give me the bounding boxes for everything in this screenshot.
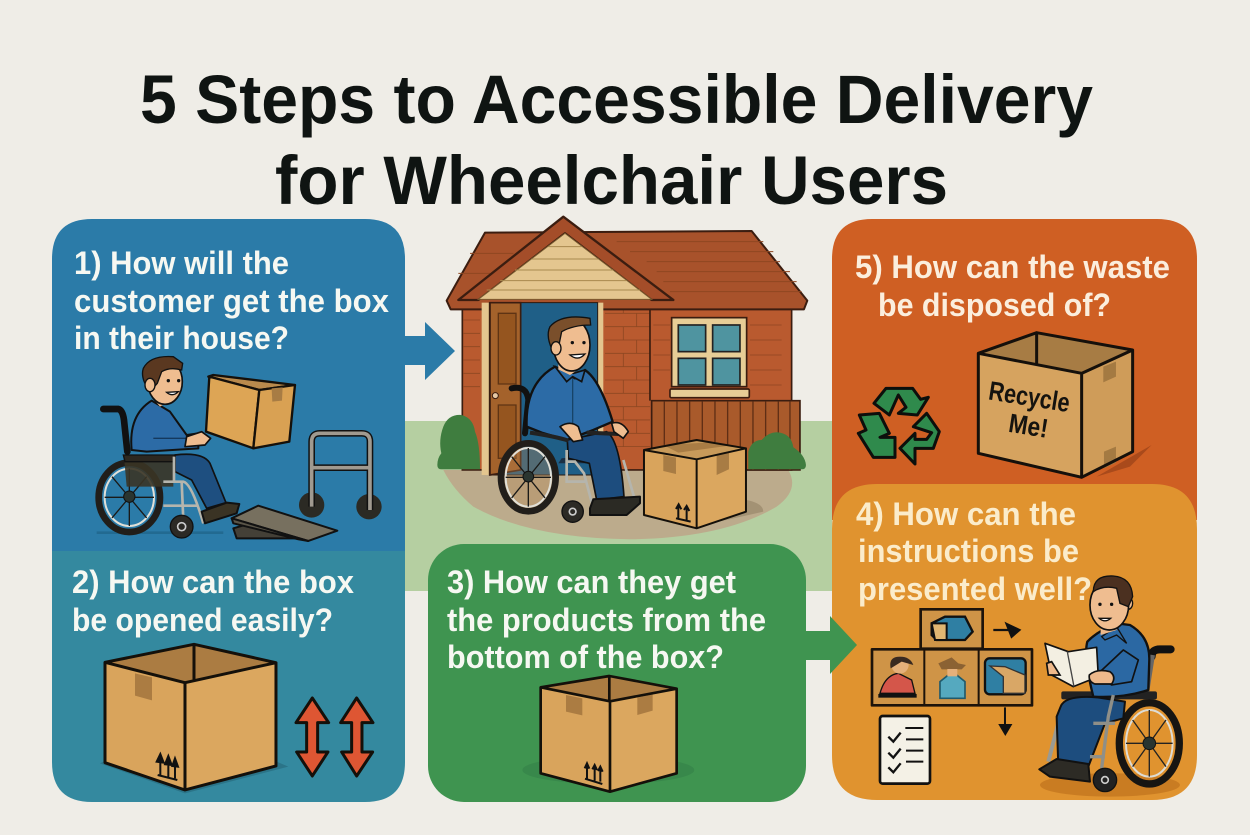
person reading in wheelchair xyxy=(1039,576,1180,797)
step 3 text: bottom of the box? xyxy=(447,639,724,675)
step 2 text: 2) How can the box xyxy=(72,564,354,600)
panel: step 2 opening box xyxy=(52,551,405,802)
panel: step 4 instructions xyxy=(832,484,1197,800)
step 3 text: 3) How can they get xyxy=(447,564,736,600)
step 1 text: 1) How will the xyxy=(74,245,289,281)
person in wheelchair with box, ramp and frame xyxy=(97,356,382,541)
arrow: step 1 to house xyxy=(405,322,455,380)
title: 5 Steps to Accessible Delivery xyxy=(140,61,1093,138)
panel: step 5 waste xyxy=(832,219,1197,520)
roof xyxy=(447,231,807,309)
doorway xyxy=(482,303,603,475)
step 4 text: 4) How can the xyxy=(856,496,1076,532)
icon: box held xyxy=(206,375,295,448)
step 1 text xyxy=(74,245,389,356)
step 5 text xyxy=(855,249,1170,323)
path xyxy=(443,470,792,539)
icon: ramp xyxy=(232,506,337,541)
step 4 text xyxy=(856,496,1092,607)
icon: up and down arrows xyxy=(296,698,373,776)
bushes xyxy=(437,415,806,469)
instruction pictograms xyxy=(872,609,1032,784)
window xyxy=(670,318,749,398)
panel: step 3 reaching products xyxy=(428,544,806,802)
gable xyxy=(458,217,673,300)
step 2 text xyxy=(72,564,354,638)
illustration: house with customer xyxy=(437,217,807,539)
step 5 text: be disposed of? xyxy=(878,287,1111,323)
step 1 text: customer get the box xyxy=(74,283,389,319)
door xyxy=(490,303,521,475)
title xyxy=(140,61,1093,219)
step 5 text: 5) How can the waste xyxy=(855,249,1170,285)
step 3 text xyxy=(447,564,766,675)
icon: recycle me box: Me! xyxy=(1007,408,1050,444)
shadow xyxy=(697,500,763,527)
fence xyxy=(652,401,800,470)
step 2 text: be opened easily? xyxy=(72,602,333,638)
icon: open box xyxy=(100,644,288,793)
icon: recycle me box xyxy=(978,333,1152,477)
title: for Wheelchair Users xyxy=(275,142,948,219)
house walls xyxy=(462,307,792,470)
icon: walking frame xyxy=(299,433,382,519)
icon: recycle me box: Recycle xyxy=(987,376,1072,418)
icon: recycle symbol xyxy=(858,388,939,464)
arrow: step 3 to step 4 xyxy=(800,616,857,674)
step 4 text: instructions be xyxy=(858,533,1079,569)
icon: deep box xyxy=(522,676,694,792)
step 1 text: in their house? xyxy=(74,320,289,356)
step 4 text: presented well? xyxy=(858,571,1092,607)
delivered box xyxy=(644,440,746,528)
panel: step 1 ramp and box xyxy=(52,219,405,552)
step 3 text: the products from the xyxy=(447,602,766,638)
customer in wheelchair xyxy=(501,317,640,522)
